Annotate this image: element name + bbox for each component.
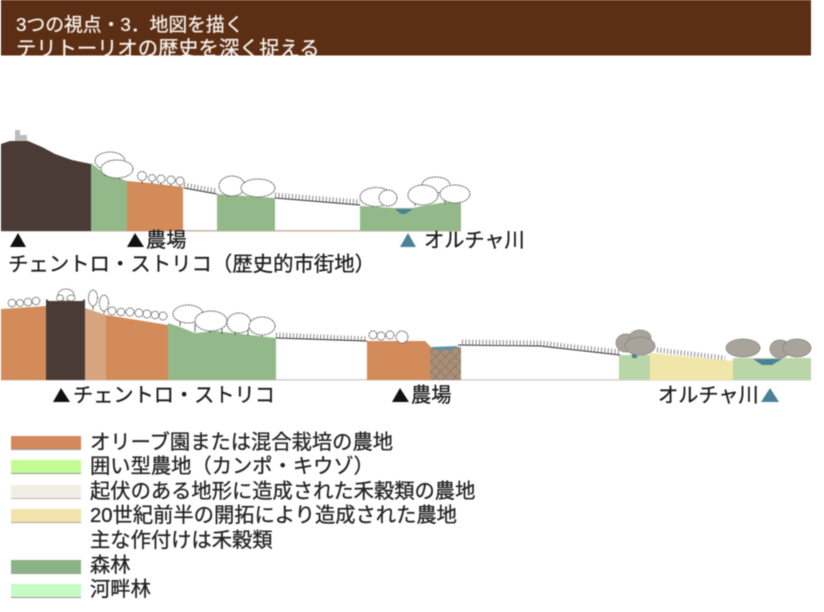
legend: reclaimed: 20世紀前半の開拓により造成された農地 <box>90 504 457 527</box>
legend: forest: 森林 <box>90 554 131 577</box>
tree trunks <box>93 304 262 337</box>
label: triangle marker <box>10 233 26 247</box>
trees <box>95 152 470 206</box>
river <box>395 209 413 214</box>
forest block 3 with river <box>360 201 461 231</box>
olive block 2 <box>106 315 168 380</box>
label: Orcia river: オルチャ川 <box>424 230 525 252</box>
legend: riparian forest: 河畔林 <box>90 578 151 601</box>
river <box>753 359 782 365</box>
historic centre block <box>46 299 85 380</box>
riparian trees <box>616 330 811 358</box>
riparian block 2 <box>733 358 811 380</box>
subtitle: テリトーリオの歴史を深く捉える <box>16 38 320 60</box>
small water <box>432 346 458 350</box>
label: Centro Storico marker: チェントロ・ストリコ <box>73 385 275 407</box>
legend: forest <box>11 554 131 577</box>
header banner <box>1 0 811 60</box>
olive block <box>1 306 46 380</box>
forest block <box>91 163 127 231</box>
reclaimed farmland block <box>650 353 733 380</box>
cereal hatches <box>276 335 725 358</box>
label: farm marker 2: 農場 <box>411 384 451 407</box>
olive block 3 <box>367 341 430 380</box>
legend: main crop note: 主な作付けは禾穀類 <box>90 529 273 552</box>
ground line <box>1 230 461 232</box>
legend: riparian forest <box>11 578 151 601</box>
olive block <box>127 181 183 231</box>
historic centre block <box>1 141 91 231</box>
ground line <box>1 379 811 381</box>
label: farm marker: 農場 <box>146 229 186 252</box>
riparian block <box>619 355 650 380</box>
mixed cultivation block <box>85 308 106 380</box>
label: farm marker <box>127 229 186 252</box>
enclosed field <box>430 347 461 380</box>
forest block <box>168 323 276 380</box>
cross-section 2: Centro Storico to Orcia river <box>1 289 811 381</box>
label: farm marker 2 <box>392 384 451 407</box>
label: Orcia river 2: オルチャ川 <box>658 385 759 407</box>
cereal hatches <box>184 185 360 205</box>
castle silhouette <box>15 130 27 141</box>
legend: enclosed farmland: 囲い型農地（カンポ・キウゾ） <box>90 455 374 478</box>
title: 3つの視点・3．地図を描く <box>16 14 243 35</box>
tree trunks <box>105 166 458 207</box>
cross-section 1: Centro Storico to Orcia river <box>1 130 470 232</box>
trees <box>8 289 408 343</box>
legend <box>11 430 475 601</box>
label: Centro Storico: チェントロ・ストリコ（歴史的市街地） <box>8 253 375 276</box>
legend: olive: オリーブ園または混合栽培の農地 <box>90 430 393 454</box>
legend: rolling cereal: 起伏のある地形に造成された禾穀類の農地 <box>90 480 475 503</box>
forest block 2 <box>217 194 275 231</box>
